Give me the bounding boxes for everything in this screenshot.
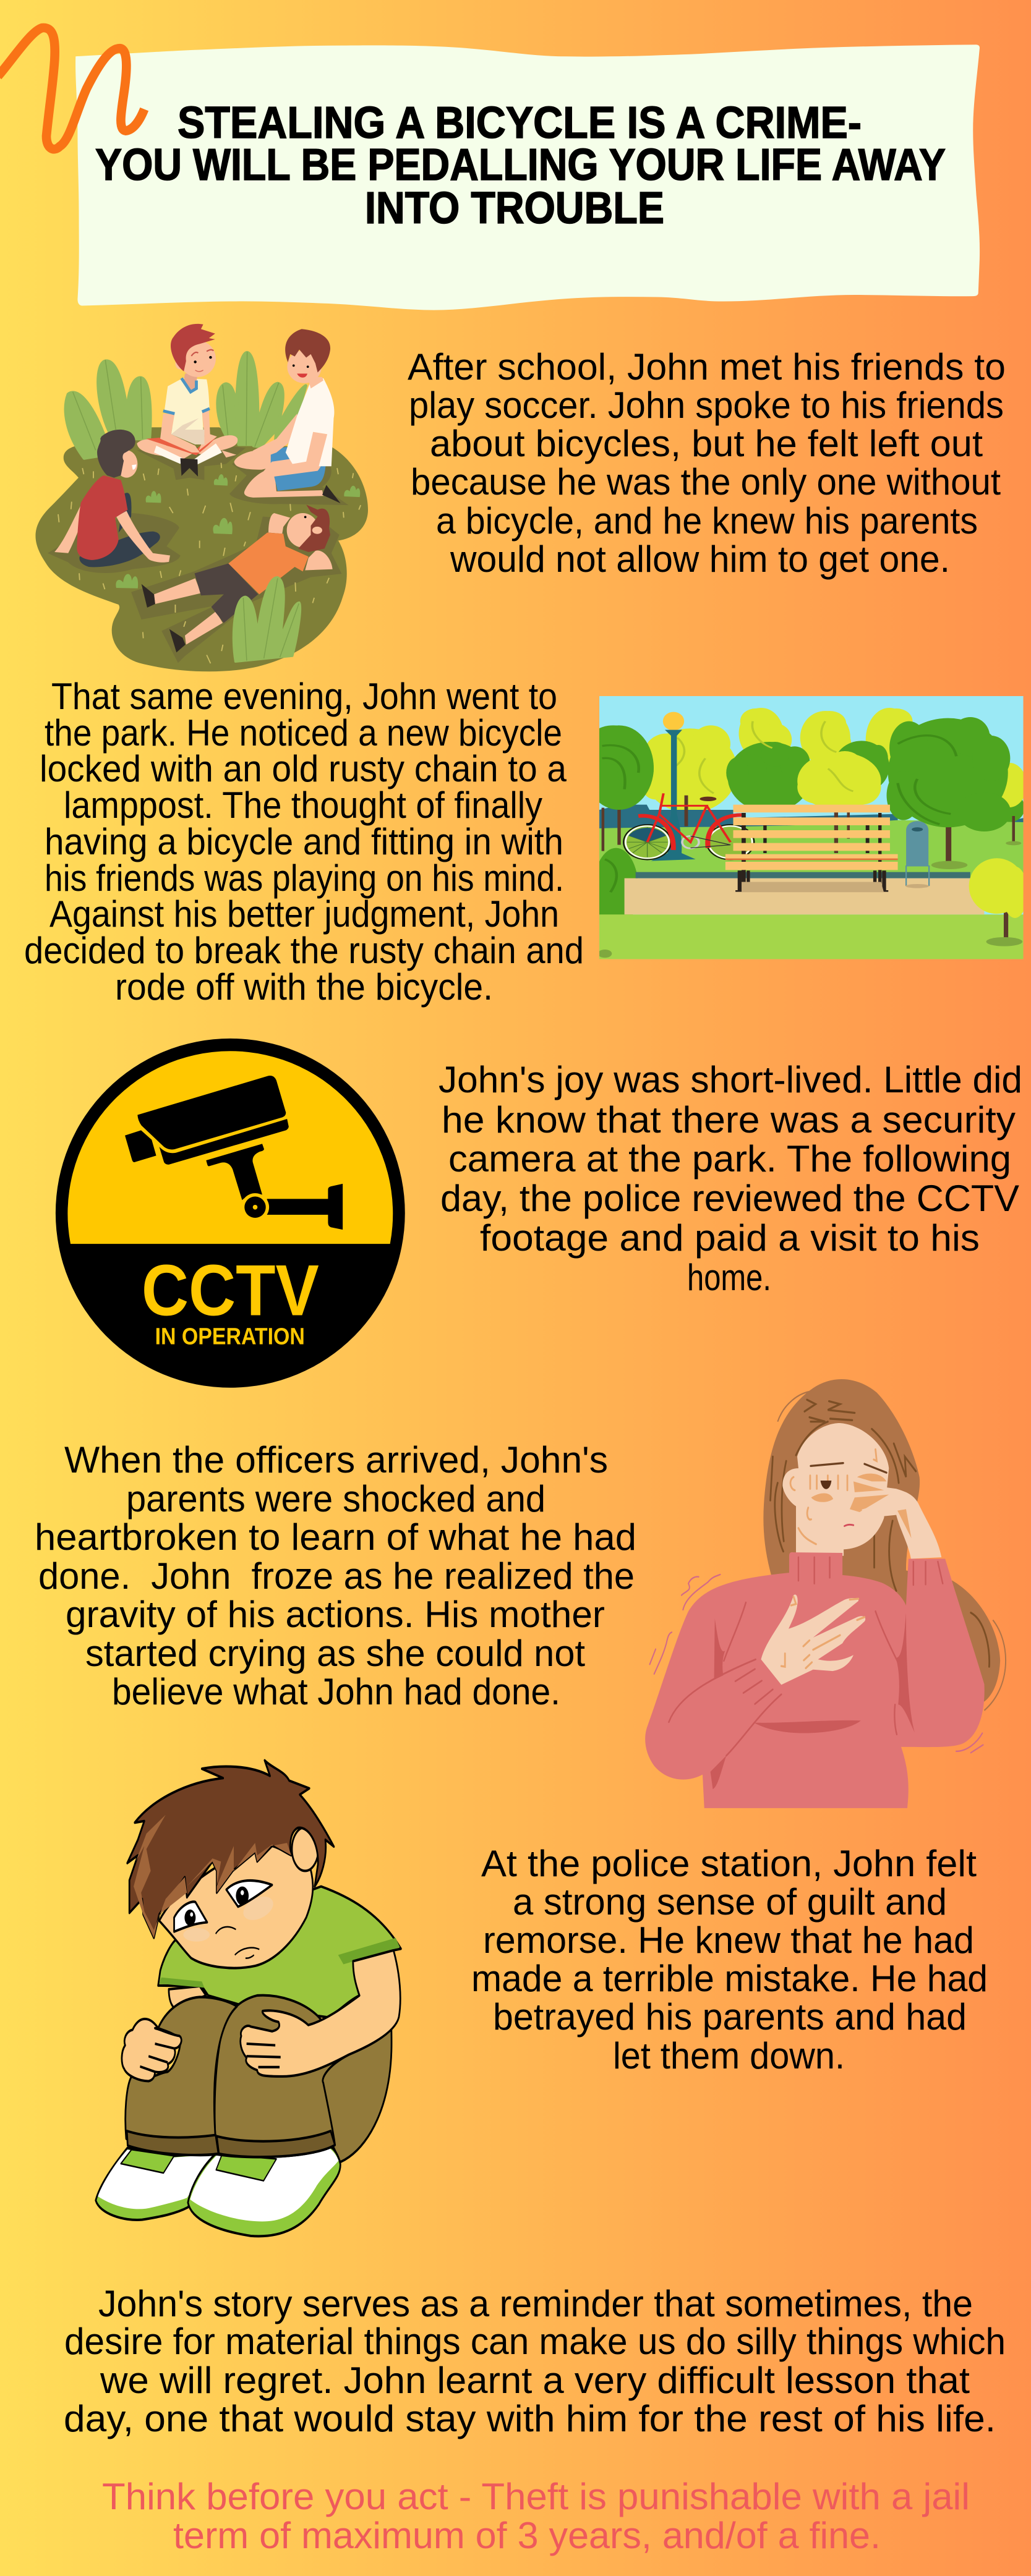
leafy bushes [66,352,306,458]
boy lying down [142,504,333,652]
right arm [241,1950,400,2077]
illustration: park with bicycle and bench [584,696,1027,959]
text: police station: made a terrible mistake. He had [471,1958,988,1999]
text: police station: betrayed his parents and had [493,1996,967,2038]
front right tree [969,858,1027,946]
text: short-lived joy: he know that there was a security [442,1099,1016,1141]
text: short-lived joy: John's joy was short-lived. Little did [438,1059,1022,1100]
hand on chest [761,1594,865,1685]
text: that same evening: decided to break the rusty chain and [24,930,584,971]
text: after school: After school, John met his friends to [408,346,1006,388]
left hand [122,2019,181,2081]
text: officers arrived: heartbroken to learn of what he had [35,1516,636,1558]
text: short-lived joy [438,1059,1022,1298]
far arm [169,1986,206,2008]
lawn [599,820,1024,878]
bench [725,805,898,892]
title: INTO TROUBLE [365,184,664,233]
illustration: friends sitting on grass [35,324,368,671]
text: after school: about bicycles, but he felt left out [430,423,983,464]
hair [763,1379,1000,1702]
text: police station: At the police station, John felt [481,1843,977,1884]
nose and mouth [216,1927,259,1958]
text: that same evening: That same evening, John went to [51,676,557,717]
icon: CCTV sign: IN OPERATION [155,1324,305,1350]
illustration: sad boy hugging knees [96,1761,401,2236]
text: John's story reminder: we will regret. John learnt a very difficult lesson that [100,2360,970,2401]
panel: title background [75,45,980,310]
back trousers [315,2026,391,2162]
text: short-lived joy: day, the police reviewed the CCTV [440,1178,1019,1219]
ground patch [35,427,368,671]
bicycle [623,793,754,860]
camera [125,1076,343,1230]
text: officers arrived: believe what John had done. [112,1671,560,1712]
text: that same evening: having a bicycle and fitting in with [45,821,563,862]
text: police station: let them down. [613,2035,845,2077]
text: that same evening: his friends was playing on his mind. [45,857,564,899]
text: John's story reminder: John's story serves as a reminder that sometimes, the [98,2283,973,2324]
shirt [158,1887,401,2017]
ear [292,1827,319,1871]
path and grass [599,914,1024,959]
text: police station [471,1843,988,2077]
text: after school: play soccer. John spoke to his friends [409,385,1004,426]
text: officers arrived: When the officers arrived, John's [64,1439,608,1481]
text: that same evening: the park. He noticed a new bicycle [45,712,562,754]
text: John's story reminder: day, one that would stay with him for the rest of his life. [64,2398,996,2439]
callout: penalty warning [102,2476,970,2556]
text: that same evening: lamppost. The thought of finally [64,784,542,826]
text: short-lived joy: camera at the park. The following [448,1138,1011,1180]
callout: penalty warning: term of maximum of 3 years, and/of a fine. [173,2515,881,2556]
text: short-lived joy: home. [687,1257,771,1298]
text: after school [408,346,1006,580]
trunks [601,795,1015,861]
face [159,1845,313,1968]
text: that same evening: locked with an old rusty chain to a [40,748,567,789]
text: after school: would not allow him to get one. [450,538,950,580]
right leg [215,1996,349,2157]
hair [127,1761,334,1938]
text: John's story reminder: desire for material things can make us do silly things which [64,2321,1006,2362]
foreground bush [233,577,301,662]
grass ticks [58,463,361,663]
callout: penalty warning: Think before you act - Theft is punishable with a jail [102,2476,970,2517]
text: police station: remorse. He knew that he had [483,1919,974,1961]
trash bin [905,821,929,888]
title [95,98,946,233]
decorative squiggle [0,28,144,149]
trouser cuffs [127,2131,335,2157]
title: STEALING A BICYCLE IS A CRIME- [178,98,862,148]
lamppost [651,712,696,861]
sign text: CCTV [142,1250,319,1331]
illustration: crying mother [645,1379,1006,1808]
skyline [599,805,1024,830]
text: that same evening: rode off with the bicycle. [115,966,493,1008]
text: officers arrived [35,1439,636,1712]
boy in red shirt [54,430,170,567]
boy in white and red [137,324,237,477]
green trees behind [726,741,1025,822]
face and neck [782,1423,889,1556]
shoes [96,2148,216,2220]
text: officers arrived: parents were shocked and [126,1478,545,1520]
boy in white and blue [234,329,341,503]
trembling lines [650,1575,983,1753]
text: that same evening [24,676,584,1008]
yellow trees [641,708,913,813]
eyes [174,1902,207,1932]
text: that same evening: Against his better judgment, John [49,893,559,935]
text: after school: a bicycle, and he knew his parents [436,500,978,542]
title: YOU WILL BE PEDALLING YOUR LIFE AWAY [95,140,946,190]
hand over eye [850,1483,941,1558]
small grass tufts [116,474,360,589]
text: after school: because he was the only one without [411,461,1001,503]
big green trees [584,717,1011,929]
text: John's story reminder [64,2283,1006,2439]
text: short-lived joy: footage and paid a visit to his [480,1217,980,1259]
front yellow tree [797,751,1027,810]
text: officers arrived: gravity of his actions. His mother [66,1594,605,1635]
text: officers arrived: done. John froze as he realized the [38,1555,635,1597]
icon: CCTV sign [56,1039,405,1388]
text: police station: a strong sense of guilt and [513,1881,947,1923]
sweater [645,1552,985,1808]
left leg [126,1997,237,2155]
text: officers arrived: started crying as she could not [85,1633,585,1674]
ground shadows [48,446,349,663]
